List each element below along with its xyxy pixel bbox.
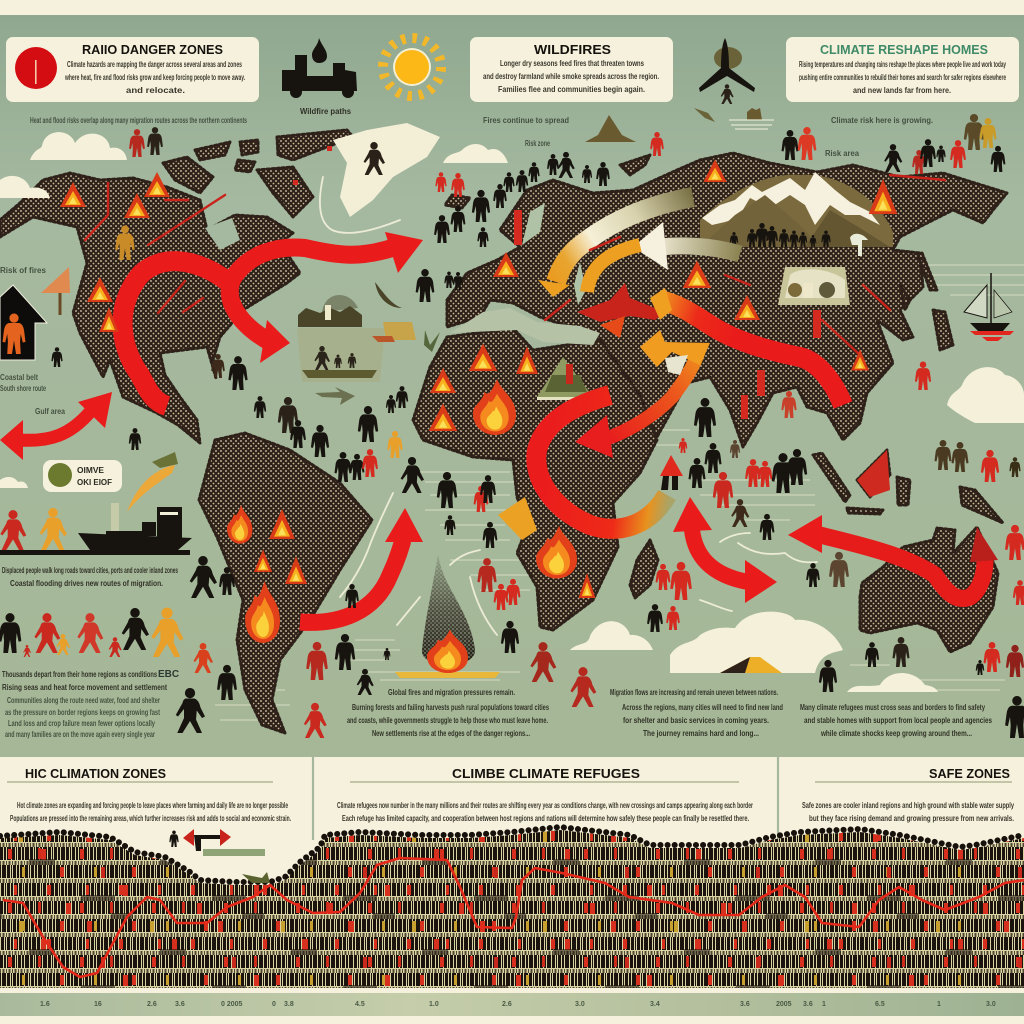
red bars on land (293, 146, 821, 419)
North America (0, 173, 300, 443)
section: hic climation zones heading: Hot climate zones are expanding and forcing people to leave places where farming and daily life are no longer possible (17, 801, 288, 810)
bottom band with axis labels: 16 (94, 1001, 102, 1008)
section: hic climation zones heading: Populations are pressed into the remaining areas, which further increases risk and adds to social and economic strain. (10, 814, 291, 823)
top panel: radio danger zones: RAIIO DANGER ZONES (82, 42, 223, 57)
South America (199, 433, 372, 733)
text block: left lower: as the pressure on border regions keeps on growing fast (5, 708, 160, 717)
Mediterranean sea (450, 308, 600, 345)
bottom band with axis labels: 2.6 (502, 1001, 512, 1008)
mountain shadow (720, 657, 750, 673)
section: hic climation zones heading: HIC CLIMATION ZONES (25, 766, 166, 781)
top panel: climate reshape homes: and new lands far from here. (853, 86, 951, 95)
cloud: top left (30, 132, 127, 160)
crowd heads along top edge (0, 827, 1024, 882)
section: climate refuges heading: CLIMBE CLIMATE REFUGES (452, 766, 640, 781)
section: safe zones heading: SAFE ZONES (929, 766, 1010, 781)
bottom band with axis labels: 1.0 (429, 1001, 439, 1008)
people: Atlantic and Americas (51, 226, 408, 598)
vignette scene: Middle East town (537, 357, 593, 400)
Hudson bay (205, 218, 240, 250)
top panel: radio danger zones: and relocate. (126, 86, 185, 95)
people: north (129, 114, 1005, 302)
bottom band with axis labels: 3.6 (803, 1001, 813, 1008)
left side captions: Gulf area (35, 407, 65, 416)
ground fire with stippled smoke (395, 555, 500, 678)
top panel: radio danger zones: Climate hazards are mapping the danger across several areas and zones (67, 60, 242, 69)
warning flag sign (41, 267, 70, 315)
top panel: wildfires: Families flee and communities begin again. (498, 85, 645, 94)
cloud: indian ocean small (570, 621, 653, 650)
icon: sun (383, 38, 441, 96)
bottom band with axis labels: 2.6 (147, 1001, 157, 1008)
icon: burning truck (282, 38, 357, 98)
text block: left lower: and many families are on the move again every single year (5, 730, 155, 739)
cloud: small south east (847, 673, 938, 692)
text block: left middle (2, 566, 178, 588)
map panel background (0, 15, 1024, 757)
text block: left middle: Coastal flooding drives new routes of migration. (10, 579, 163, 588)
text block: centre lower: Burning forests and failing harvests push rural populations toward cities (352, 703, 549, 712)
top panel: wildfires: WILDFIRES (534, 42, 611, 57)
Europe and Asia (447, 153, 1007, 447)
clouds (0, 132, 1024, 692)
text block: left lower: Rising seas and heat force movement and settlement (2, 683, 167, 692)
mountain under large cloud (720, 657, 782, 673)
people: running evacuees left (0, 508, 328, 738)
icon: aeroplane (694, 38, 762, 122)
text block: left lower: EBC (158, 669, 179, 680)
Africa (413, 328, 657, 630)
left side captions: Coastal belt (0, 373, 38, 382)
Greenland ice (333, 123, 440, 217)
section: hic climation zones heading (7, 766, 291, 823)
text block: right lower: while climate shocks keep growing around them... (820, 729, 972, 738)
badge: green circle label: OKI EIOF (77, 478, 112, 487)
captions under top panels: Heat and flood risks overlap along many migration routes across the northern continents (30, 116, 247, 125)
bottom band with axis labels: 1 (822, 1001, 826, 1008)
bottom band with axis labels: 3.0 (986, 1001, 996, 1008)
flames on land (227, 379, 577, 643)
Australia (860, 527, 998, 652)
crowd chart: rows of people (0, 825, 1024, 988)
crowd trend line (3, 858, 1024, 977)
small grey fish arrow (315, 387, 355, 405)
top panel: climate reshape homes (786, 37, 1019, 102)
text block: centre lower: New settlements rise at the edges of the danger regions... (372, 729, 530, 738)
house icon with person (0, 285, 47, 360)
red arrow: North America loop (123, 261, 232, 406)
sailboat (964, 273, 1014, 341)
small boat on crowd dip (242, 872, 270, 883)
badge: green circle label: OIMVE (77, 466, 105, 475)
small double arrow sign above crowd (169, 829, 265, 856)
top panel: radio danger zones: where heat, fire and flood risks grow and keep forcing people to move away. (64, 73, 245, 82)
top panel: wildfires: and destroy farmland while smoke spreads across the region. (483, 72, 659, 81)
small white building (850, 234, 868, 256)
bottom band with axis labels: 0 2005 (221, 1001, 243, 1008)
warning triangles (60, 160, 897, 598)
badge: green circle label (43, 460, 122, 492)
cloud: north atlantic (443, 144, 508, 163)
people: Atlantic south and Africa (334, 449, 692, 707)
section divider lines (313, 757, 778, 840)
bottom band with axis labels: 3.8 (284, 1001, 294, 1008)
top panel: wildfires (470, 37, 673, 102)
text block: centre right lower: Across the regions, many cities will need to find new land (622, 703, 783, 712)
truck caption: Wildfire paths (300, 107, 352, 116)
small water lines under plane (729, 120, 774, 129)
captions under top panels: Risk area (825, 149, 860, 158)
icon: red circle (15, 47, 57, 89)
section: climate refuges heading: Each refuge has limited capacity, and cooperation between host regions and nations will determine how safely these people can finally be resettled there. (342, 814, 749, 823)
text block: centre lower (347, 688, 549, 738)
section: climate refuges heading: Climate refugees now number in the many millions and their routes are shifting every year as conditions change, with new crossings and camps appearing along each border (337, 801, 753, 810)
cloud: large south (670, 612, 843, 673)
text block: left lower: Thousands depart from their home regions as conditions (2, 670, 157, 679)
text block: centre right lower: The journey remains hard and long... (643, 729, 759, 738)
top panel: radio danger zones (6, 37, 259, 102)
red double arrow: lower left (0, 392, 112, 460)
text block: centre lower: and coasts, while governments struggle to help those who must leave home. (347, 716, 548, 725)
white current lines (320, 177, 817, 635)
top panel: wildfires: Longer dry seasons feed fires that threaten towns (500, 59, 644, 68)
text block: left middle: Displaced people walk long roads toward cities, ports and cooler inland zones (2, 566, 178, 575)
people in mountain scene (730, 223, 831, 247)
Baltic and Caspian inlets (522, 203, 586, 305)
text block: centre right lower (610, 688, 783, 738)
text block: centre right lower: for shelter and basic services in coming years. (623, 716, 769, 725)
bottom band with axis labels: 0 (272, 1001, 276, 1008)
cloud: pacific east (947, 367, 1024, 423)
section: safe zones heading (802, 766, 1014, 823)
captions under top panels: Climate risk here is growing. (831, 116, 933, 125)
small mountain camp (585, 115, 636, 142)
left side captions (0, 266, 65, 416)
left side captions: South shore route (0, 384, 46, 393)
bottom band with axis labels: 3.6 (740, 1001, 750, 1008)
cloud: far left (0, 176, 50, 198)
red arrow: Africa loop (498, 395, 667, 540)
bottom band with axis labels: 1.6 (40, 1001, 50, 1008)
top panel: climate reshape homes: CLIMATE RESHAPE HOMES (820, 42, 988, 57)
bottom band with axis labels (0, 993, 1024, 1016)
ocean ripple lines (215, 265, 1024, 720)
vignette scene: Asian town (778, 267, 850, 305)
small red migration paths on land (85, 175, 945, 355)
red arrow: Atlantic crossing (230, 232, 423, 363)
red triangle marker with figure in Arabian Sea (660, 455, 683, 490)
bottom band with axis labels: 3.6 (175, 1001, 185, 1008)
bottom band with axis labels: 2005 (776, 1001, 792, 1008)
bottom band with axis labels: 3.0 (575, 1001, 585, 1008)
left side captions: Risk of fires (0, 266, 47, 275)
cloud: small left (0, 477, 28, 488)
text block: left lower: Communities along the route need water, food and shelter (7, 696, 160, 705)
red double arrow: Asia band (577, 283, 843, 405)
bottom band with axis labels: 1 (937, 1001, 941, 1008)
cargo ship (0, 503, 192, 555)
Islands of Asia and Oceania (445, 155, 1003, 523)
section: climate refuges heading (337, 766, 753, 823)
red arrow: South America to Africa (300, 508, 423, 622)
continents: stippled landmasses (0, 130, 1007, 733)
cream and gold arrow: into Europe (538, 197, 693, 297)
captions under top panels (30, 116, 933, 158)
text block: left lower: Land loss and crop failure mean fewer options locally (8, 719, 155, 728)
cone shape with plane near Caribbean (127, 452, 178, 512)
text block: left lower (2, 669, 179, 739)
bottom band with axis labels: 3.4 (650, 1001, 660, 1008)
text block: right lower (800, 703, 992, 738)
captions under top panels: Fires continue to spread (483, 116, 569, 125)
orange to red arrow: Arabia to Africa (575, 330, 710, 458)
red arrow: Australia to Asia (788, 515, 998, 598)
Arctic islands (163, 130, 353, 217)
captions under top panels: Risk zone (525, 139, 550, 148)
mountain scene in Asia (700, 172, 893, 256)
text block: centre lower: Global fires and migration pressures remain. (388, 688, 515, 697)
red dark triangle near Southeast Asia (857, 450, 890, 497)
cream arrow with orange tail (587, 222, 740, 292)
flood scene with boat (297, 282, 440, 382)
bottom band with axis labels: 6.5 (875, 1001, 885, 1008)
Madagascar (630, 540, 658, 598)
people: Indian Ocean and Oceania (679, 362, 1024, 738)
red double arrow: Indian Ocean (673, 497, 777, 603)
text block: centre right lower: Migration flows are increasing and remain uneven between nations. (610, 688, 778, 697)
bottom band with axis labels: 4.5 (355, 1001, 365, 1008)
